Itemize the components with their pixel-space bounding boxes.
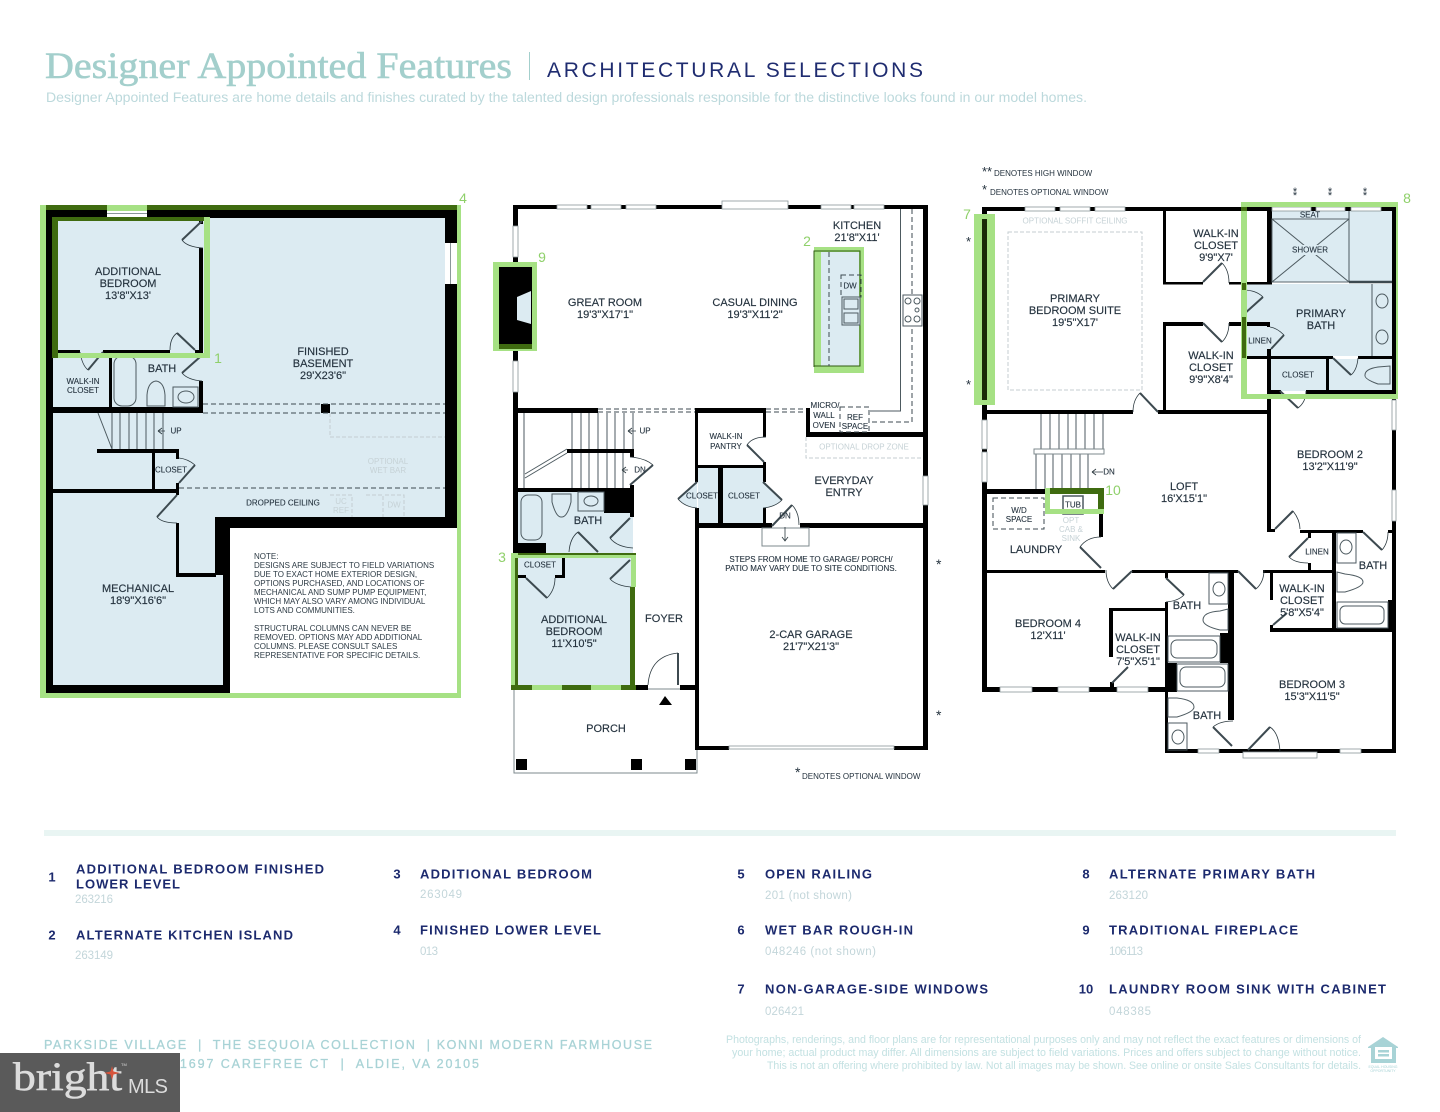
room labels: CLOSET	[1194, 240, 1238, 252]
room labels: LOFT	[1170, 481, 1198, 493]
item 6	[737, 922, 913, 958]
room labels: 19'5"X17'	[1052, 317, 1098, 329]
room labels	[1010, 228, 1387, 722]
panel: lower level floor plan: OPTIONAL	[368, 456, 409, 466]
panel: upper level floor plan: OPTIONAL SOFFIT CEILING	[1023, 216, 1127, 226]
panel: lower level floor plan: WET BAR	[370, 466, 406, 474]
panel: main level floor plan: DN	[634, 466, 646, 474]
panel: upper level floor plan: LINEN	[1305, 548, 1329, 556]
room labels: ADDITIONAL	[541, 614, 607, 626]
panel: upper level floor plan: SHOWER	[1292, 246, 1328, 254]
window key: *	[1328, 190, 1333, 202]
room labels: 21'8"X11'	[834, 232, 880, 244]
panel: upper level floor plan: SPACE	[1006, 514, 1032, 524]
item 8	[1082, 866, 1315, 902]
room labels: CLOSET	[1280, 595, 1324, 607]
panel: main level floor plan: CLOSET	[728, 492, 760, 500]
room labels: WALK-IN	[1115, 632, 1161, 644]
panel: main level floor plan: 9	[538, 249, 546, 265]
room labels: PRIMARY	[1050, 293, 1101, 305]
stairs	[524, 409, 806, 488]
note text: COLUMNS. PLEASE CONSULT SALES	[254, 642, 397, 651]
panel: main level floor plan: REF	[847, 412, 863, 422]
icon: equal housing opportunity: EQUAL HOUSING	[1368, 1065, 1398, 1069]
panel: lower level floor plan: WALK-IN	[66, 376, 100, 386]
footer community address	[44, 1038, 652, 1071]
room labels: EVERYDAY	[815, 475, 874, 487]
item 5: 201 (not shown)	[765, 890, 852, 902]
panel: main level floor plan: DENOTES OPTIONAL WINDOW	[802, 772, 921, 781]
porch	[514, 689, 697, 773]
room labels: 12'X11'	[1030, 630, 1066, 642]
window key: *	[1363, 186, 1368, 198]
item 1: ADDITIONAL BEDROOM FINISHED	[76, 862, 324, 876]
item 1: 1	[48, 870, 56, 884]
note text: LOTS AND COMMUNITIES.	[254, 606, 355, 615]
room labels: WALK-IN	[1279, 583, 1325, 595]
room labels: 19'3"X11'2"	[727, 309, 783, 321]
room labels: 11'X10'5"	[551, 638, 597, 650]
item 10: 10	[1079, 982, 1093, 996]
room labels: BEDROOM 4	[1015, 618, 1081, 630]
item 3	[393, 866, 592, 901]
room labels: 2-CAR GARAGE	[769, 629, 853, 641]
note text: STRUCTURAL COLUMNS CAN NEVER BE	[254, 624, 412, 633]
item 6: 6	[737, 922, 745, 938]
room labels: 19'3"X17'1"	[577, 309, 633, 321]
footer community address: 41697 CAREFREE CT | ALDIE, VA 20105	[171, 1057, 479, 1071]
item 4: 4	[393, 922, 401, 938]
panel: upper level floor plan: SINK	[1062, 534, 1081, 542]
panel: main level floor plan: *	[936, 707, 942, 723]
panel: lower level floor plan: DROPPED CEILING	[246, 498, 320, 508]
panel: upper level floor plan: W/D	[1011, 506, 1027, 514]
room labels: 13'2"X11'9"	[1302, 461, 1358, 473]
room labels: GREAT ROOM	[568, 297, 642, 309]
panel: lower level floor plan: UP	[170, 426, 182, 436]
item 3: ADDITIONAL BEDROOM	[420, 866, 592, 882]
item 9	[1082, 922, 1298, 958]
doors	[80, 221, 203, 523]
item 9: 9	[1082, 922, 1090, 938]
item 7: 7	[737, 982, 745, 996]
panel: upper level floor plan: LINEN	[1248, 336, 1272, 346]
panel: main level floor plan: DN	[779, 512, 791, 520]
secondary bath fixtures	[1168, 533, 1388, 750]
room labels: 16'X15'1"	[1161, 493, 1207, 505]
room labels: 15'3"X11'5"	[1284, 691, 1340, 703]
room labels: BASEMENT	[293, 358, 354, 370]
windows	[513, 201, 928, 505]
room labels: 21'7"X21'3"	[783, 641, 839, 653]
panel: upper level floor plan: TUB	[1065, 500, 1081, 510]
windows	[982, 207, 1396, 758]
room labels: BATH	[574, 515, 602, 527]
highlight 2: kitchen island	[814, 247, 864, 373]
panel: lower level floor plan: CLOSET	[67, 386, 99, 394]
item 3: 263049	[420, 889, 462, 901]
window key: DENOTES HIGH WINDOW	[994, 169, 1093, 178]
room labels: BATH	[1307, 320, 1335, 332]
room labels: 18'9"X16'6"	[110, 595, 166, 607]
highlight 4: finished lower level	[40, 205, 461, 698]
note text: DUE TO EXACT HOME EXTERIOR DESIGN,	[254, 570, 417, 579]
room labels: CASUAL DINING	[712, 297, 798, 309]
room labels: PRIMARY	[1296, 308, 1347, 320]
panel: main level floor plan: UP	[639, 426, 651, 436]
item 4: FINISHED LOWER LEVEL	[420, 922, 601, 938]
item 9: TRADITIONAL FIREPLACE	[1109, 922, 1298, 938]
basement stairs	[98, 413, 165, 449]
walls	[513, 205, 928, 750]
footer disclaimer	[726, 1034, 1362, 1072]
window key: *	[1363, 190, 1368, 202]
primary bath fixtures	[1272, 211, 1392, 384]
subtitle: architectural selections: ARCHITECTURAL SELECTIONS	[547, 59, 923, 82]
room labels	[541, 220, 881, 735]
item 8: ALTERNATE PRIMARY BATH	[1109, 866, 1315, 882]
item 5	[737, 866, 872, 902]
note text: MECHANICAL AND SUMP PUMP EQUIPMENT,	[254, 588, 426, 597]
item 7: NON-GARAGE-SIDE WINDOWS	[765, 982, 988, 996]
footer disclaimer: your home; actual product may differ. All dimensions are subject to field variations. Prices and offers subject to change without notice.	[732, 1047, 1361, 1059]
panel: upper level floor plan: 10	[1105, 482, 1121, 498]
item 8: 263120	[1109, 890, 1148, 902]
highlight 1: additional bedroom	[52, 217, 210, 358]
room labels: FOYER	[645, 613, 683, 625]
window key: *	[1293, 190, 1298, 202]
title: Designer Appointed Features	[45, 46, 512, 87]
panel: main level floor plan: WALL	[813, 410, 835, 420]
highlight 3: additional bedroom	[511, 553, 636, 690]
item 6: 048246 (not shown)	[765, 946, 876, 958]
panel: main level floor plan: 3	[498, 549, 506, 565]
panel: main level floor plan: *	[936, 556, 942, 572]
room labels: 5'8"X5'4"	[1280, 607, 1324, 619]
window key	[966, 164, 1368, 392]
panel: main level floor plan: OVEN	[813, 420, 836, 430]
page header	[45, 46, 1087, 105]
note text: REPRESENTATIVE FOR SPECIFIC DETAILS.	[254, 651, 420, 660]
panel: main level floor plan: STEPS FROM HOME TO GARAGE/ PORCH/	[729, 554, 893, 564]
note text: OPTIONS PURCHASED, AND LOCATIONS OF	[254, 579, 425, 588]
item 2: 263149	[75, 950, 113, 962]
panel: upper level floor plan: CLOSET	[1282, 370, 1314, 380]
logo: bright MLS: TM	[121, 1062, 127, 1067]
doors	[526, 437, 809, 685]
panel: main level floor plan: PATIO MAY VARY DUE TO SITE CONDITIONS.	[725, 564, 897, 572]
panel: main level floor plan: SPACE	[842, 422, 868, 430]
panel: main level floor plan: MICRO/	[811, 400, 840, 410]
item 7	[737, 982, 988, 1018]
footer community address: PARKSIDE VILLAGE | THE SEQUOIA COLLECTION | KONNI MODERN FARMHOUSE	[44, 1038, 652, 1052]
fireplace	[493, 257, 537, 361]
item 8: 8	[1082, 866, 1090, 882]
stairs	[1034, 414, 1104, 489]
room labels: BATH	[1173, 600, 1201, 612]
panel: main level floor plan: *	[795, 764, 801, 780]
legend: architectural selections list	[48, 862, 1386, 1018]
item 1: LOWER LEVEL	[76, 876, 180, 892]
panel: lower level floor plan: UC	[335, 496, 347, 506]
item 1: 263216	[75, 894, 113, 906]
room labels	[95, 266, 354, 607]
panel: upper level floor plan: 7	[963, 206, 971, 222]
room labels: KITCHEN	[833, 220, 881, 232]
room labels: BEDROOM SUITE	[1029, 305, 1121, 317]
highlight 7: non-garage-side windows	[974, 214, 995, 405]
room labels: BEDROOM 3	[1279, 679, 1345, 691]
highlight 10: laundry sink	[1045, 488, 1104, 514]
panel: lower level floor plan	[40, 190, 467, 698]
room labels: 9'9"X8'4"	[1189, 374, 1233, 386]
item 10	[1079, 982, 1386, 1018]
room labels: CLOSET	[1189, 362, 1233, 374]
panel: main level floor plan: DW	[843, 282, 857, 290]
item 6: WET BAR ROUGH-IN	[765, 922, 913, 938]
panel: upper level floor plan: OPT	[1063, 516, 1079, 524]
panel: lower level floor plan: DW	[387, 500, 401, 510]
room labels: CLOSET	[1116, 644, 1160, 656]
doors	[1080, 263, 1388, 752]
window key: *	[1328, 186, 1333, 198]
highlight 8: alternate primary bath	[1241, 202, 1398, 399]
room labels: 7'5"X5'1"	[1116, 656, 1160, 668]
room labels: WALK-IN	[1188, 350, 1234, 362]
room labels: 9'9"X7'	[1199, 252, 1233, 264]
room labels: BATH	[148, 363, 176, 375]
panel: main level floor plan: PANTRY	[710, 442, 743, 450]
panel: lower level floor plan: REF	[333, 506, 349, 514]
note text: REMOVED. OPTIONS MAY ADD ADDITIONAL	[254, 633, 423, 642]
item 5: OPEN RAILING	[765, 866, 872, 882]
room labels: WALK-IN	[1193, 228, 1239, 240]
room labels: BATH	[1193, 710, 1221, 722]
window key: DENOTES OPTIONAL WINDOW	[990, 188, 1109, 197]
note text: DESIGNS ARE SUBJECT TO FIELD VARIATIONS	[254, 561, 434, 570]
item 3: 3	[393, 866, 401, 882]
panel: main level floor plan	[493, 201, 942, 781]
logo: bright MLS: bright	[13, 1054, 122, 1099]
item 4	[393, 922, 601, 958]
window key: *	[1293, 186, 1298, 198]
room labels: BEDROOM	[100, 278, 156, 290]
room labels: 13'8"X13'	[105, 290, 151, 302]
icon: equal housing opportunity	[1368, 1037, 1398, 1073]
panel: lower level floor plan: 1	[214, 350, 222, 366]
panel: lower level floor plan: CLOSET	[155, 466, 187, 474]
panel: main level floor plan: CLOSET	[524, 560, 556, 570]
panel: lower level floor plan: 4	[459, 190, 467, 206]
item 7: 026421	[765, 1006, 804, 1018]
logo: bright MLS: MLS	[128, 1076, 168, 1098]
panel: main level floor plan: CLOSET	[686, 492, 718, 500]
bath fixtures	[521, 492, 604, 540]
footer disclaimer: This is not an offering where prohibited by law. Not all images may be shown. See online or onsite Sales Consultants for details.	[767, 1060, 1361, 1072]
item 9: 106113	[1109, 946, 1143, 958]
window top and right	[107, 211, 457, 284]
panel: upper level floor plan: CAB &	[1059, 524, 1084, 534]
item 4: 013	[420, 946, 438, 958]
room labels: LAUNDRY	[1010, 544, 1063, 556]
room labels: BEDROOM 2	[1297, 449, 1363, 461]
panel: main level floor plan: WALK-IN	[709, 432, 743, 440]
walls	[982, 207, 1396, 753]
kitchen counters and range	[870, 209, 922, 422]
intro text: Designer Appointed Features are home details and finishes curated by the talented design professionals responsible for the distinctive looks found in our model homes.	[46, 90, 1087, 105]
window key: **	[982, 164, 992, 179]
icon: equal housing opportunity: OPPORTUNITY	[1370, 1069, 1396, 1073]
room labels: PORCH	[586, 723, 626, 735]
footer disclaimer: Photographs, renderings, and floor plans are for representational purposes only and may not reflect the exact features or dimensions of	[726, 1034, 1362, 1046]
room labels: 29'X23'6"	[300, 370, 346, 382]
room labels: BATH	[1359, 560, 1387, 572]
window key: *	[982, 182, 987, 197]
item 1	[48, 862, 324, 906]
room labels: FINISHED	[297, 346, 349, 358]
room labels: MECHANICAL	[102, 583, 174, 595]
panel: upper level floor plan	[963, 164, 1411, 758]
item 10: 048385	[1109, 1006, 1151, 1018]
logo: bright MLS	[0, 1053, 180, 1112]
item 2: 2	[48, 928, 56, 942]
window key: *	[966, 377, 971, 392]
panel: main level floor plan: OPTIONAL DROP ZONE	[819, 442, 909, 452]
window key: *	[966, 234, 971, 249]
divider bar	[44, 830, 1396, 836]
item 10: LAUNDRY ROOM SINK WITH CABINET	[1109, 982, 1386, 996]
bath fixtures	[114, 356, 198, 407]
item 5: 5	[737, 866, 745, 882]
item 2: ALTERNATE KITCHEN ISLAND	[76, 928, 293, 942]
room labels: BEDROOM	[546, 626, 602, 638]
note text: NOTE:	[254, 552, 278, 561]
panel: upper level floor plan: 8	[1403, 190, 1411, 206]
note text: WHICH MAY ALSO VARY AMONG INDIVIDUAL	[254, 597, 426, 606]
laundry dashed space and tub	[993, 496, 1083, 529]
panel: main level floor plan: 2	[803, 233, 811, 249]
room labels: ENTRY	[825, 487, 863, 499]
item 2	[48, 928, 293, 962]
room labels: ADDITIONAL	[95, 266, 161, 278]
panel: upper level floor plan: SEAT	[1300, 210, 1320, 220]
panel: upper level floor plan: DN	[1103, 468, 1115, 476]
